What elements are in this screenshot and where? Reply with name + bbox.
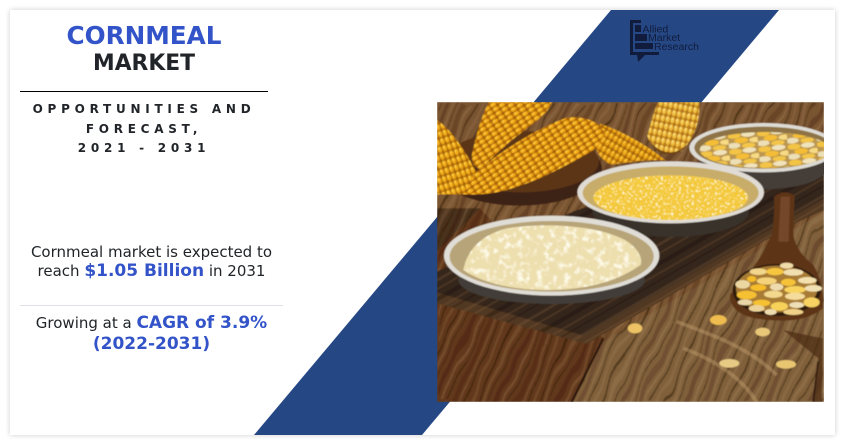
bowl of coarse yellow cornmeal [577, 161, 764, 237]
subtitle: opportunities and forecast: OPPORTUNITIES AND [33, 102, 255, 116]
market value statement: Cornmeal market is expected to [31, 243, 272, 261]
bowl of fine pale corn flour [444, 216, 659, 304]
divider under title [20, 91, 268, 92]
subtitle: opportunities and forecast: 2021 - 2031 [78, 141, 210, 155]
CAGR statement: (2022-2031) [93, 334, 210, 354]
wooden table [437, 102, 824, 402]
logo: Allied Market Research [632, 22, 699, 62]
logo: Allied Market Research: Allied [642, 24, 668, 36]
CAGR statement [36, 313, 267, 354]
subtitle: opportunities and forecast: FORECAST, [86, 122, 202, 136]
wooden spoon with kernels [730, 192, 823, 321]
plate with corn cobs [437, 102, 699, 206]
logo: Allied Market Research: Research [654, 41, 699, 53]
subtitle: opportunities and forecast [33, 102, 255, 155]
loose corn kernels [628, 315, 796, 369]
photo: corn and cornmeal on wooden table [437, 102, 837, 402]
dark cutting board [437, 168, 824, 344]
divider between statements [20, 305, 283, 306]
logo: Allied Market Research: Market [648, 32, 680, 44]
CAGR statement: Growing at a CAGR of 3.9% [36, 313, 267, 333]
market value statement: reach $1.05 Billion in 2031 [38, 261, 265, 281]
title: Market: MARKET [93, 51, 195, 76]
bowl of whole kernels [689, 123, 837, 189]
title: Cornmeal: CORNMEAL [66, 21, 222, 50]
blue diagonal band [254, 10, 779, 435]
market value statement [31, 243, 272, 281]
